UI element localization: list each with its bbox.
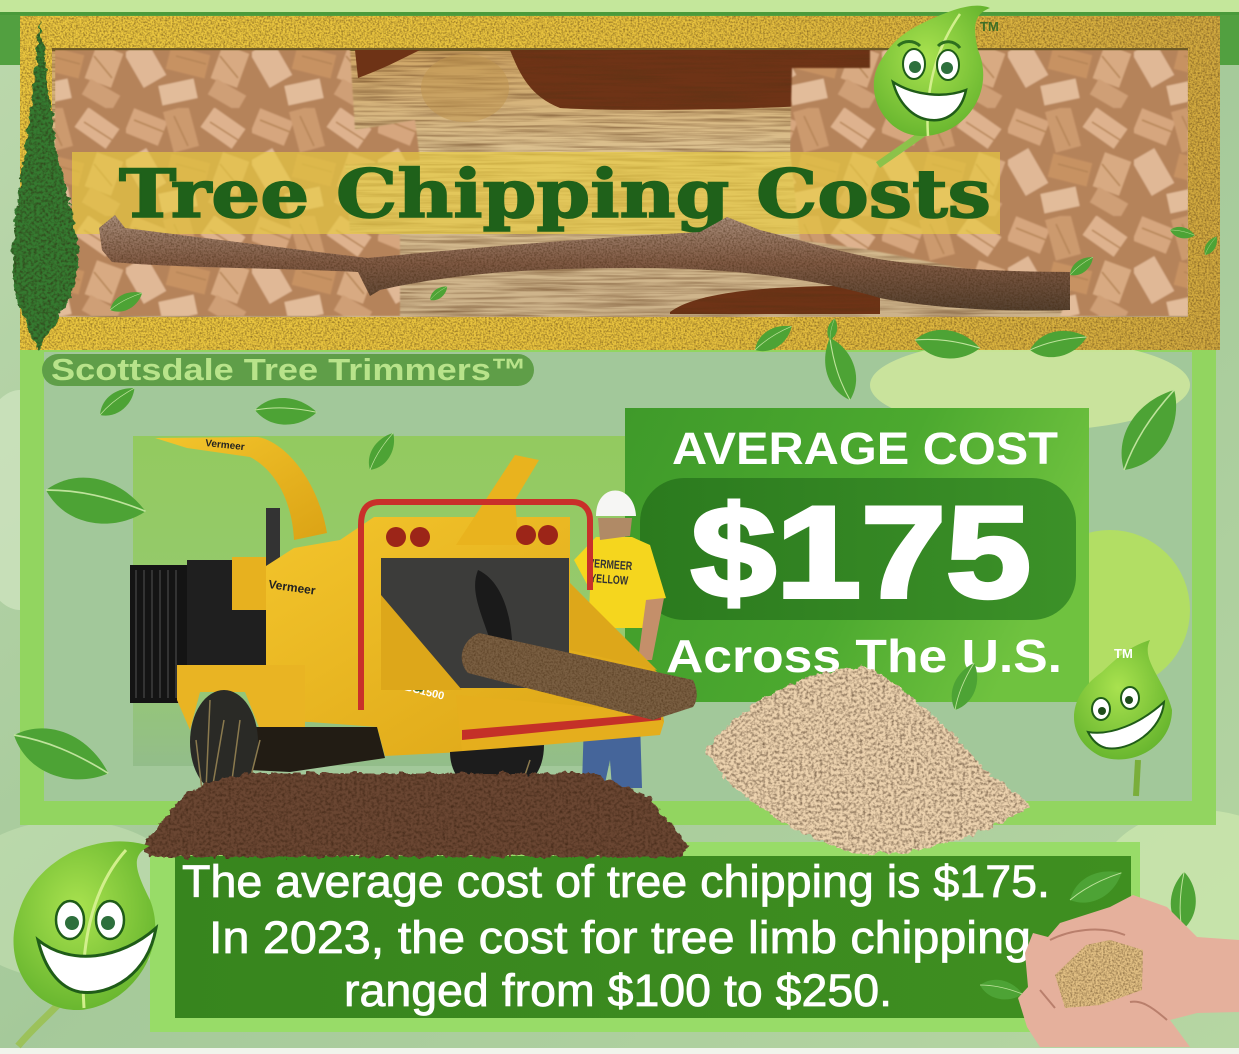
panel: main green frame xyxy=(32,339,1204,813)
wood chips right xyxy=(790,50,1188,316)
wood chips left xyxy=(55,50,420,316)
wheels xyxy=(190,690,258,794)
price pill xyxy=(640,478,1076,620)
decal xyxy=(385,652,452,692)
wood chipper machine xyxy=(130,437,664,794)
summary text: ranged from $100 to $250. xyxy=(344,965,892,1016)
worker: YELLOW xyxy=(590,571,629,588)
tray xyxy=(456,695,664,752)
wood shavings pile xyxy=(706,668,1028,854)
price: $175 xyxy=(691,479,1031,625)
trademark: TM xyxy=(980,19,999,34)
wood chipper machine: Vermeer xyxy=(268,577,317,598)
red rail xyxy=(361,502,590,710)
body xyxy=(266,517,664,756)
chute xyxy=(155,437,327,540)
radiator xyxy=(130,565,188,703)
panel: average cost xyxy=(625,408,1089,702)
under chassis xyxy=(250,727,385,772)
hands holding chips xyxy=(1018,895,1239,1047)
wood chipper machine: BC1500 xyxy=(403,681,445,703)
panel: header wood frame xyxy=(20,16,1220,350)
average cost heading: AVERAGE COST xyxy=(672,423,1058,474)
tail lights xyxy=(386,527,406,547)
leaf mascot: top xyxy=(874,6,999,165)
engine xyxy=(187,560,267,665)
brand label: Scottsdale Tree Trimmers™ xyxy=(51,352,527,387)
trademark: TM xyxy=(1114,646,1133,661)
scattered leaves xyxy=(6,223,1222,1006)
dark wood band lower xyxy=(670,286,880,314)
worker: VERMEER xyxy=(588,556,633,573)
chips in hand xyxy=(1055,940,1143,1008)
leaf mascot: right xyxy=(1074,640,1172,796)
wood knot xyxy=(421,54,509,122)
dirt mound xyxy=(140,773,689,857)
summary text: The average cost of tree chipping is $175. xyxy=(182,856,1050,907)
hopper xyxy=(381,558,569,688)
panel: summary xyxy=(150,842,1140,1032)
tree branch xyxy=(99,215,1070,310)
cypress tree xyxy=(12,20,79,352)
fender xyxy=(177,665,305,735)
log xyxy=(462,633,697,720)
leaf mascot: bottom left xyxy=(13,841,156,1046)
across the us: Across The U.S. xyxy=(666,630,1062,682)
summary text: In 2023, the cost for tree limb chipping xyxy=(209,912,1031,963)
summary text xyxy=(182,856,1050,1016)
title band xyxy=(72,152,1000,234)
title: Tree Chipping Costs xyxy=(119,155,991,233)
dark wood band xyxy=(510,50,875,110)
worker xyxy=(574,490,666,788)
arm xyxy=(456,455,539,545)
wood chipper machine: Vermeer xyxy=(205,438,245,453)
